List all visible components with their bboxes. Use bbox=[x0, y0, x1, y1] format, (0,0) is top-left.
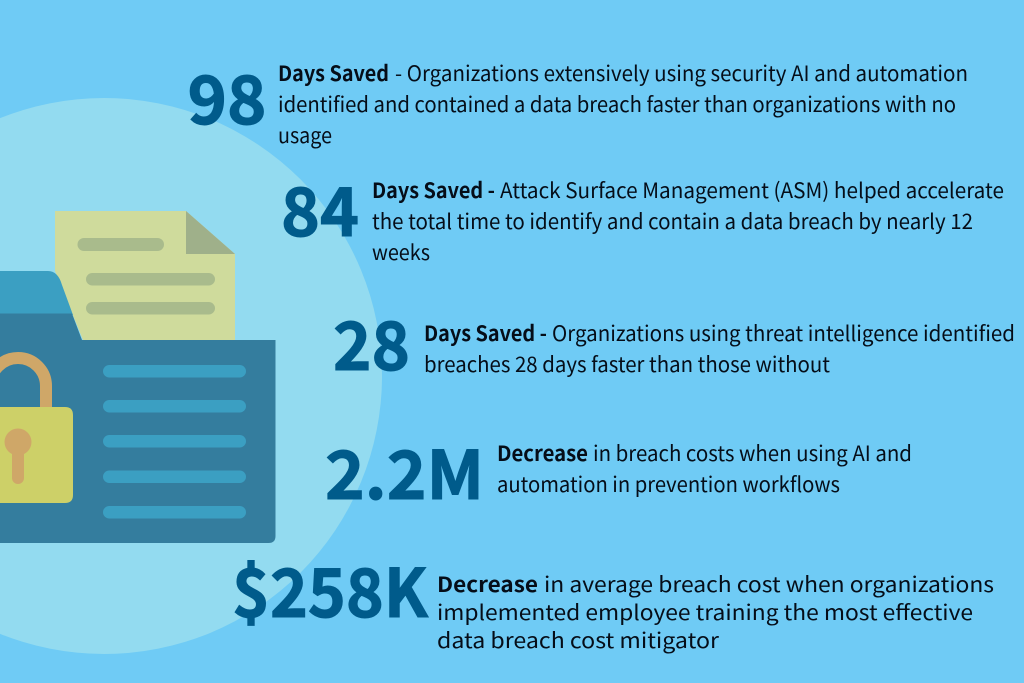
text block: 2.2M description: Decrease bbox=[497, 438, 588, 468]
text block: 98 description: Days Saved bbox=[278, 58, 389, 88]
number: $258K: $258K bbox=[232, 540, 429, 637]
text block: 84 description bbox=[372, 175, 1004, 267]
text block: 98 description bbox=[278, 58, 968, 150]
text block: 98 description: identified and contained a data breach faster than organizations with no bbox=[278, 89, 956, 119]
number: 98: 98 bbox=[188, 47, 266, 144]
text block: 2.2M description: automation in prevention workflows bbox=[497, 469, 840, 499]
text block: 98 description: - Organizations extensively using security AI and automation bbox=[395, 58, 968, 88]
text block: 84 description: Attack Surface Management (ASM) helped accelerate bbox=[500, 175, 1004, 205]
number: 84: 84 bbox=[281, 159, 359, 256]
stat: 98 days saved bbox=[188, 47, 968, 150]
text block: 28 description: breaches 28 days faster than those without bbox=[424, 349, 830, 379]
text block: $258K description: implemented employee training the most effective bbox=[437, 597, 973, 627]
text block: $258K description: data breach cost mitigator bbox=[437, 625, 720, 655]
text block: $258K description: in average breach cost when organizations bbox=[544, 569, 994, 599]
text block: 2.2M description: in breach costs when using AI and bbox=[593, 438, 912, 468]
text block: $258K description bbox=[437, 569, 994, 655]
text block: 84 description: weeks bbox=[372, 237, 430, 267]
stat: 84 days saved bbox=[281, 159, 1004, 267]
background circle bbox=[0, 98, 382, 654]
stat: $258K decrease bbox=[232, 540, 994, 655]
text block: 2.2M description bbox=[497, 438, 912, 499]
number: 2.2M: 2.2M bbox=[325, 422, 484, 519]
text block: 84 description: Days Saved - bbox=[372, 175, 495, 205]
text block: 28 description bbox=[424, 318, 1015, 379]
icon: folder tab bbox=[0, 271, 73, 315]
text block: 28 description: Organizations using threat intelligence identified bbox=[552, 318, 1015, 348]
text block: 28 description: Days Saved - bbox=[424, 318, 547, 348]
text block: $258K description: Decrease bbox=[437, 569, 538, 599]
icon: document bbox=[55, 211, 235, 345]
text block: 84 description: the total time to identify and contain a data breach by nearly 12 bbox=[372, 206, 973, 236]
icon: padlock bbox=[0, 358, 73, 503]
icon: folder with document and padlock bbox=[0, 211, 276, 543]
stat: 2.2M decrease bbox=[325, 422, 912, 519]
stat: 28 days saved bbox=[333, 293, 1015, 390]
number: 28: 28 bbox=[333, 293, 410, 390]
icon: folder body bbox=[0, 314, 276, 543]
text block: 98 description: usage bbox=[278, 120, 332, 150]
